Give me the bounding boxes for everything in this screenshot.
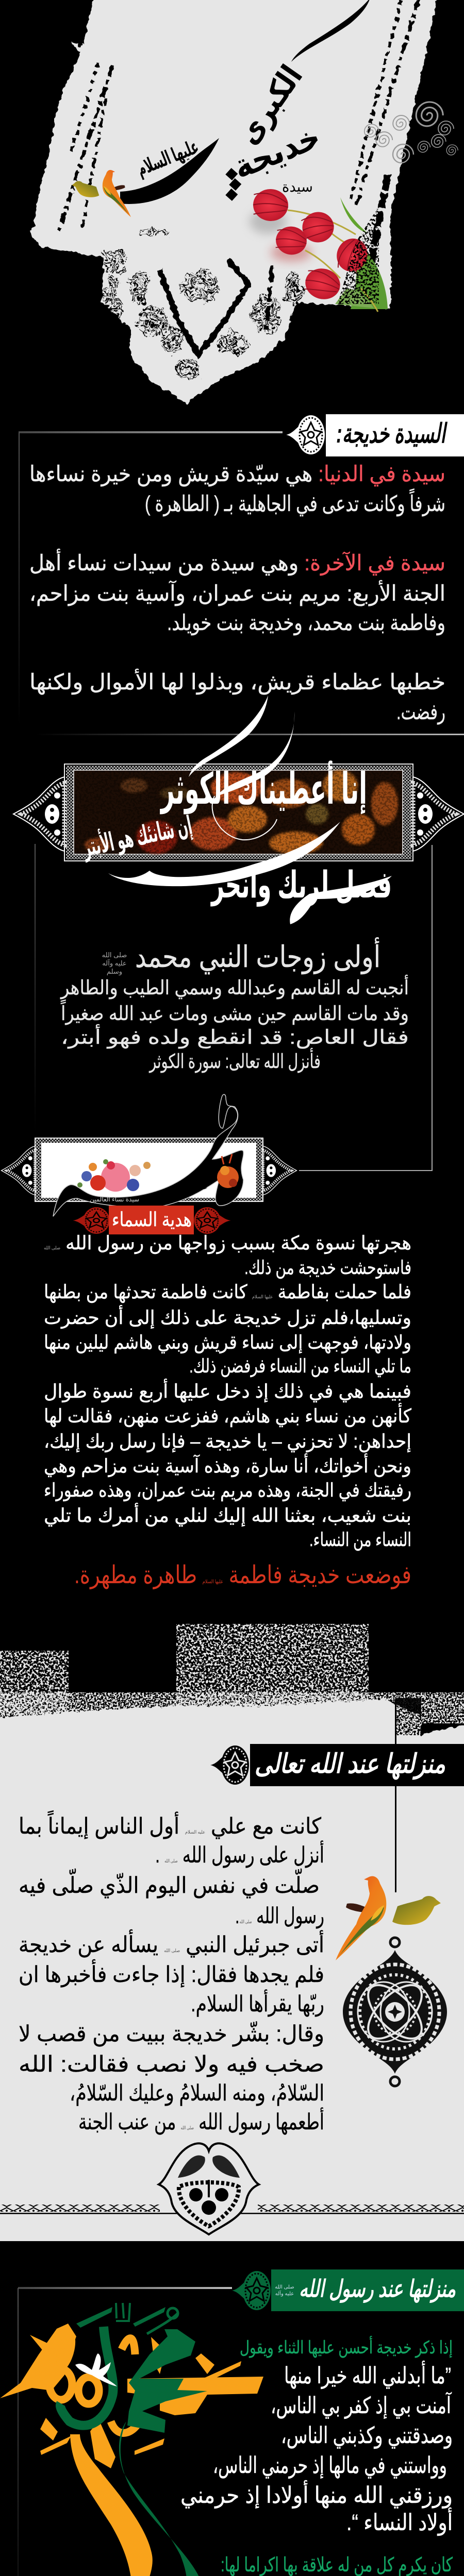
text block: the story of Fatima's birth: ولادتها، فوجهت إلى نساء قريش وبني هاشم ليلين منها: [44, 1332, 411, 1353]
text block: status with God: صخب فيه ولا نصب فقالت: الله: [19, 2052, 324, 2077]
panel: Al-Kawthar banner and first wife of the Prophet: [12, 696, 464, 1171]
decorative swirl cloud: [364, 102, 458, 163]
text block: status with God: صلّت في نفس اليوم الذّي صلّى فيه: [19, 1869, 320, 1899]
calligraphy: orange and green Muhammad and Khadija: [0, 2303, 263, 2576]
icon: perched birds: [72, 170, 131, 217]
text block: the story of Fatima's birth: فلما حملت بفاطمة عليها السلام كانت فاطمة تحدثها من بطنها: [44, 1281, 411, 1303]
text block: first wife of the Prophet: فقال العاص: قد انقطع ولده فهو أبتر،: [61, 1024, 409, 1049]
hero panel: Khadija calligraphy on torn manuscript: [30, 0, 458, 405]
hanging cord: [395, 1699, 396, 1892]
torn manuscript paper: [29, 0, 438, 403]
text block: lady of this world and the hereafter: سيدة في الآخرة: وهي سيدة من سيدات نساء أهل: [29, 549, 445, 576]
text block: lady of this world and the hereafter: خطبها عظماء قريش، وبذلوا لها الأموال ولكنها: [29, 668, 445, 695]
banner end caps: [13, 777, 464, 851]
text block: status with God: أطعمها رسول الله صلى الله من عنب الجنة: [78, 2107, 324, 2135]
black and white Fatima calligraphy: سيدة نساء العالمين: [90, 1196, 139, 1204]
black speckled band over tulips: [338, 206, 379, 304]
text block: the story of Fatima's birth: النساء من النساء.: [309, 1529, 411, 1551]
text block: status with God: ربّها يقرأها السلام.: [191, 1989, 324, 2017]
text block: the story of Fatima's birth: وتسليها،فلم تزل خديجة على ذلك إلى أن حضرت: [44, 1305, 411, 1329]
heading: her status with the Prophet: [271, 2269, 464, 2311]
ornament: arabesque teardrop: [343, 1938, 447, 2086]
large calligraphy: Khadija al-Kubra: عليها السلام: [134, 136, 202, 181]
text block: first wife of the Prophet: عليه وآله: [102, 959, 127, 968]
text block: status with God: كانت مع علي عليه السلام أول الناس إيماناً بما: [19, 1810, 321, 1839]
heading: Lady Khadija: [326, 414, 464, 456]
text block: first wife of the Prophet: أولى زوجات النبي محمد: [135, 937, 380, 975]
text block: status with God: وقال: بشّر خديجة ببيت من قصب لا: [19, 2021, 324, 2047]
black and white Fatima calligraphy: عليها السلام: [179, 1184, 207, 1191]
text block: status with God: فلم يجدها فقال: إذا جاءت فأخبرها ان: [19, 1959, 324, 1988]
heading: gift from heaven: هدية السماء: [112, 1209, 192, 1231]
text block: lady of this world and the hereafter: الجنة الأربع: مريم بنت عمران، وآسية بنت مزاحم،: [29, 580, 445, 606]
text block: the story of Fatima's birth: ونحن أخواتك، أنا سارة، وهذه آسية بنت مزاحم وهي: [44, 1453, 411, 1477]
Fatima banner ornament: [2, 1138, 296, 1201]
text block: he praised her when mentioned: [180, 2336, 453, 2536]
panel: her status with God (light background): [0, 1624, 464, 2241]
text block: the story of Fatima's birth: هجرتها نسوة مكة بسبب زواجها من رسول الله صلى الله: [44, 1232, 411, 1254]
ornamental banner with floral painting: [64, 764, 413, 861]
text block: status with God: أتى جبرئيل النبي صلى الله يسأله عن خديجة: [19, 1929, 324, 1958]
heading: her status with the Prophet: صلى الله: [275, 2284, 294, 2290]
text block: first wife of the Prophet: [60, 937, 409, 1073]
text block: lady of this world and the hereafter: سيدة في الدنيا: هي سيّدة قريش ومن خيرة نساءها: [29, 462, 445, 487]
text block: lady of this world and the hereafter: [29, 462, 445, 724]
white calligraphy: Surat al-Kawthar: إن شانئك هو الأبتر: [79, 809, 195, 863]
text block: lady of this world and the hereafter: رفضت.: [396, 700, 445, 724]
panel: gift from heaven, Fatima banner: [1, 1094, 411, 1589]
red medallions: [73, 1207, 231, 1234]
heading: her status with God: [250, 1744, 464, 1786]
red tulips bouquet: [250, 188, 388, 312]
text block: first wife of the Prophet: أنجبت له القاسم وعبدالله وسمي الطيب والطاهر: [60, 975, 409, 999]
large calligraphy: Khadija al-Kubra: سيدة: [282, 179, 313, 195]
large calligraphy: Khadija al-Kubra: خديجة: [228, 117, 325, 186]
large calligraphy: Khadija al-Kubra: [120, 0, 370, 204]
icon: green medallion: [232, 2271, 271, 2310]
text block: the story of Fatima's birth: كأنهن من نساء بني هاشم، ففزعت منهن، فقالت لها: [44, 1403, 411, 1427]
text block: first wife of the Prophet: وسلم: [107, 968, 122, 976]
text block: the story of Fatima's birth: [44, 1232, 411, 1589]
text block: first wife of the Prophet: وقد مات القاسم حين مشى ومات عبد الله صغيراً: [61, 999, 409, 1025]
text block: status with God: [19, 1810, 324, 2135]
heading: gift from heaven: [109, 1206, 194, 1234]
text block: first wife of the Prophet: فأنزل الله تعالى: سورة الكوثر: [149, 1048, 321, 1073]
floral bouquet: [77, 1159, 151, 1192]
black and white Fatima calligraphy: [53, 1094, 243, 1216]
light background panel: [0, 1699, 464, 2251]
icon: white medallion: [286, 415, 325, 454]
grunge silhouette blocks: [0, 1624, 464, 1723]
speckled block: [396, 1698, 421, 1735]
text block: first wife of the Prophet: صلى الله: [102, 951, 127, 959]
heading: her status with the Prophet: عليه وآله: [275, 2290, 294, 2297]
icon: white dove: [75, 2353, 117, 2386]
pendant calligraphic pattern: [102, 228, 302, 379]
white calligraphy: Surat al-Kawthar: [79, 696, 392, 924]
text block: the story of Fatima's birth: إحداهن: لا تحزني – يا خديجة – فإنا رسل ربك إليك،: [44, 1431, 411, 1452]
text block: the story of Fatima's birth: بنت شعيب، بعثنا الله إليك لنلي من أمرك ما تلي: [44, 1503, 411, 1527]
manuscript dark border columns: [58, 0, 419, 301]
text block: the story of Fatima's birth: فوضعت خديجة فاطمة عليها السلام طاهرة مطهرة.: [74, 1562, 411, 1589]
panel: her status with the Prophet: [0, 2269, 464, 2576]
icon: two birds: [336, 1876, 441, 1960]
text block: status with God: أنزل على رسول الله صلى الله .: [155, 1840, 324, 1868]
large calligraphy: Khadija al-Kubra: الكبرى: [230, 59, 310, 151]
ornament: shield medallion with border chain: [0, 2143, 464, 2234]
icon: dark medallion: [210, 1745, 249, 1785]
text block: the story of Fatima's birth: فاستوحشت خديجة من ذلك.: [244, 1257, 411, 1279]
text block: the story of Fatima's birth: فبينما هي في ذلك إذ دخل عليها أربع نسوة طوال: [44, 1379, 411, 1402]
text block: status with God: السّلامُ، ومنه السلامُ وعليك السّلامُ،: [70, 2081, 324, 2106]
text block: status with God: رسول الله صلى الله.: [235, 1904, 324, 1929]
panel: Lady Khadija introduction: [19, 414, 464, 725]
